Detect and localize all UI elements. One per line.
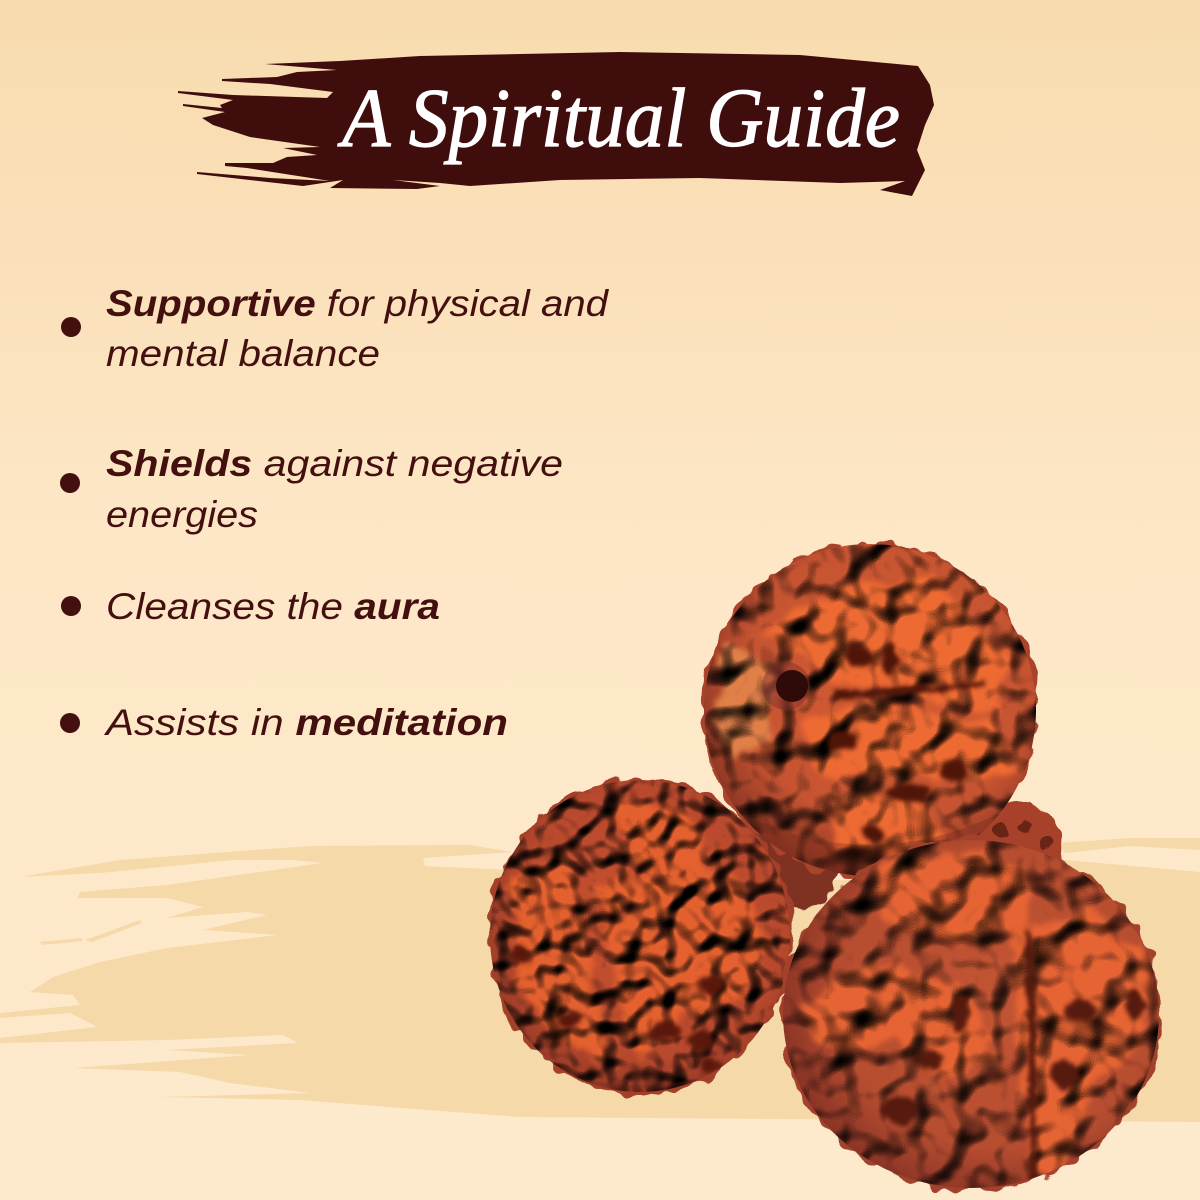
bright plates: [715, 575, 1020, 870]
bullet 2: [60, 443, 563, 535]
bullet 1: Supportive for physical and: [106, 283, 610, 324]
bullet list: [60, 283, 610, 743]
bullet 4: Assists in meditation: [104, 702, 508, 743]
rudraksha beads: [480, 540, 1165, 1195]
lower brush band: [0, 838, 1200, 1122]
bullet 1: mental balance: [106, 333, 380, 374]
bead: back right: [972, 802, 1064, 894]
bead: front right: [775, 835, 1165, 1195]
bullet 3: Cleanses the aura: [106, 586, 440, 627]
bead: hidden middle: [733, 810, 837, 914]
dark pits: [827, 644, 985, 841]
bead: top: [700, 540, 1040, 880]
title: A Spiritual Guide: [337, 72, 900, 165]
bullet 2: Shields against negative: [106, 443, 563, 484]
bullet 2: energies: [106, 494, 258, 535]
title brush stroke: [178, 52, 934, 196]
bead hole: [762, 662, 810, 710]
bead: left: [480, 775, 805, 1100]
bullet 1: [61, 283, 610, 374]
